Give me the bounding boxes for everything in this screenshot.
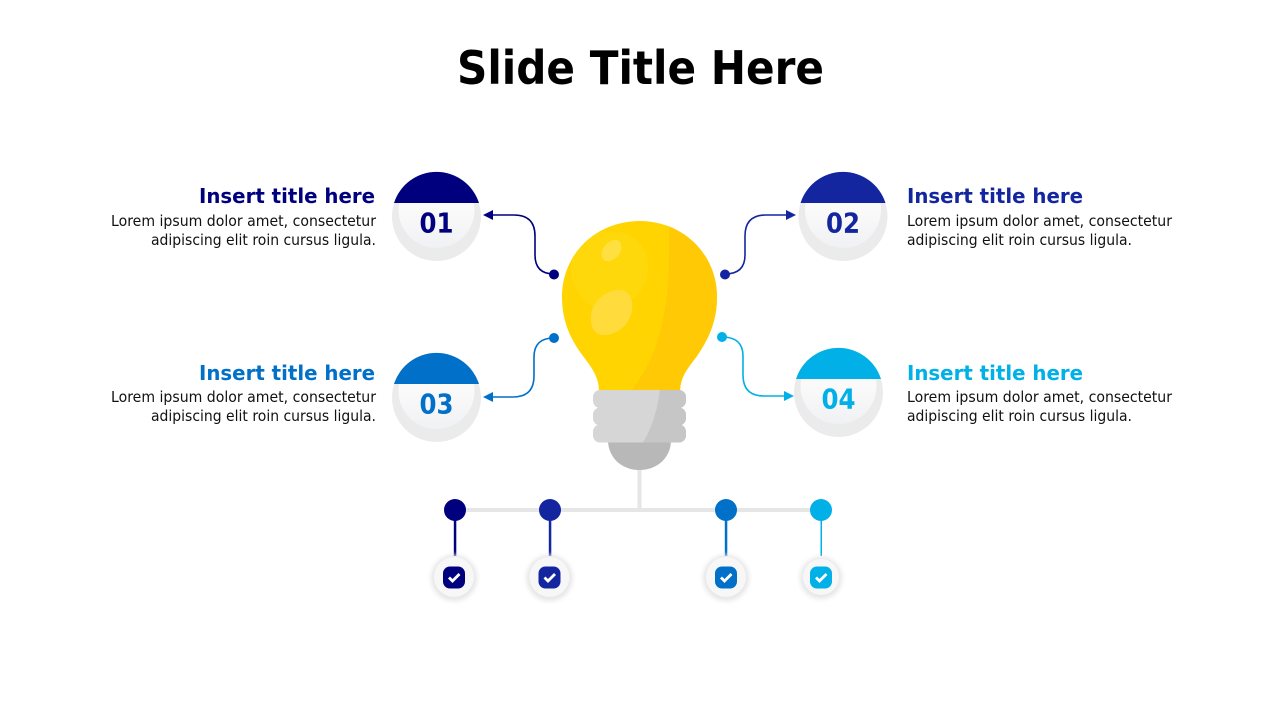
number badge 03: [392, 353, 481, 442]
arrow: bulb to 03: [483, 333, 559, 402]
panel: item 03 text: [111, 361, 377, 425]
number badge 02: [798, 172, 888, 261]
heading: item 02: Insert title here: [907, 184, 1083, 208]
number badge 01: 01: [420, 206, 454, 240]
text block: item 02: [907, 212, 1173, 249]
text block: item 02: adipiscing elit roin cursus ligula.: [907, 231, 1132, 249]
node 2: [526, 499, 572, 601]
title: Slide Title Here: [457, 41, 824, 95]
panel: item 02 text: [907, 184, 1173, 249]
number badge 03: 03: [420, 388, 454, 420]
text block: item 04: Lorem ipsum dolor amet, consectetur: [907, 388, 1173, 406]
panel: item 04 text: [907, 361, 1173, 425]
text block: item 04: [907, 388, 1173, 425]
text block: item 03: adipiscing elit roin cursus ligula.: [151, 407, 376, 425]
heading: item 01: Insert title here: [199, 184, 375, 208]
node 1: [431, 499, 477, 601]
arrow: bulb to 02: [720, 210, 796, 280]
arrow: bulb to 04: [717, 332, 794, 401]
number badge 04: 04: [822, 382, 856, 416]
number badge 01: [392, 172, 481, 261]
number badge 02: 02: [826, 206, 860, 240]
text block: item 01: adipiscing elit roin cursus ligula.: [151, 231, 376, 249]
number badge 04: [794, 348, 883, 437]
text block: item 03: Lorem ipsum dolor amet, consectetur: [111, 388, 377, 406]
panel: item 01 text: [111, 184, 377, 249]
node 4: [800, 499, 842, 599]
text block: item 03: [111, 388, 377, 425]
text block: item 04: adipiscing elit roin cursus ligula.: [907, 407, 1132, 425]
text block: item 01: Lorem ipsum dolor amet, consectetur: [111, 212, 377, 230]
icon: light bulb: [562, 215, 725, 470]
arrow: bulb to 01: [483, 210, 559, 280]
text block: item 02: Lorem ipsum dolor amet, consectetur: [907, 212, 1173, 230]
heading: item 04: Insert title here: [907, 361, 1083, 385]
node 3: [703, 499, 749, 601]
text block: item 01: [111, 212, 377, 249]
heading: item 03: Insert title here: [199, 361, 375, 385]
connector tree lines: [455, 468, 821, 512]
